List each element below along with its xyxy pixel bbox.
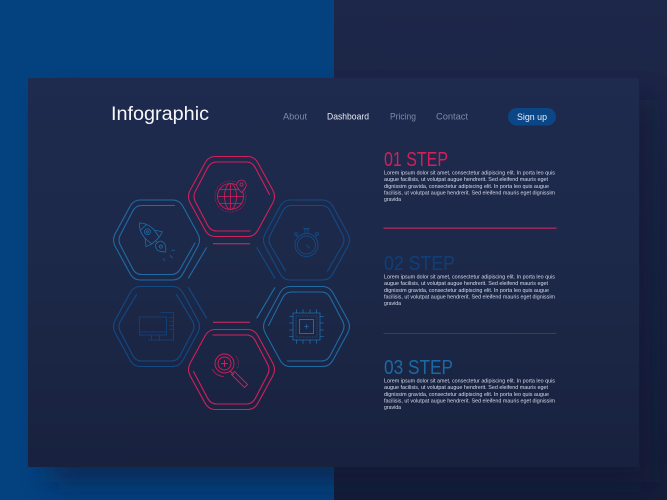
connector: blue diagonal lower right [257,287,275,318]
background: right dark block [334,0,667,500]
hexagon 1: globe (red, top) [188,156,274,236]
step 3 body: augue facilisis, ut volutpat augue hendrerit. Sed eleifend mauris eget [384,385,548,391]
step 2 body: Lorem ipsum dolor sit amet, consectetur adipiscing elit. In porta leo quis [384,275,555,281]
hexagon 5: chip (blue, lower right) [264,286,350,366]
hexagon 4: monitor (dim blue, lower left) [114,286,200,366]
step 2 body [384,275,555,307]
connector: blue diagonal [188,247,207,278]
connector: red line above bottom hexagon [213,321,250,323]
step 3 body: gravida [384,405,402,411]
title: Infographic [111,104,209,125]
step 3 body: facilisis, ut volutpat augue hendrerit. Sed eleifend mauris eget dignissim [384,398,555,404]
divider: red [384,228,556,229]
nav: Pricing: Pricing [390,112,416,122]
step 2 heading: 02 STEP [384,253,455,275]
connector: dim blue diagonal [257,247,275,278]
step 2 body: gravida [384,301,402,307]
hexagon 6: magnifier (red, bottom) [188,330,274,410]
connector: dim blue diagonal lower left [188,287,207,318]
sign up button: Sign up [517,112,547,123]
step 1 body: gravida [384,197,402,203]
step 1 [384,149,555,203]
step 1 body: facilisis, ut volutpat augue hendrerit. Sed eleifend mauris eget dignissim [384,190,555,196]
nav: Contact: Contact [436,112,468,122]
step 3 body: Lorem ipsum dolor sit amet, consectetur adipiscing elit. In porta leo quis [384,379,555,385]
hexagon 3: stopwatch (dim blue, right) [264,200,350,280]
icon: monitor and tower [140,312,174,341]
step 1 body: Lorem ipsum dolor sit amet, consectetur adipiscing elit. In porta leo quis [384,171,555,177]
main panel [28,78,639,467]
divider: blue [384,333,556,334]
nav: About: About [283,112,307,122]
step 2 [384,253,555,307]
step 2 body: augue facilisis, ut volutpat augue hendrerit. Sed eleifend mauris eget [384,281,548,287]
sign up button [508,108,556,126]
hexagon 2: rocket (blue, left) [114,200,200,280]
icon: globe with pin [215,180,246,212]
step 2 body: facilisis, ut volutpat augue hendrerit. Sed eleifend mauris eget dignissim [384,294,555,300]
step 1 body: augue facilisis, ut volutpat augue hendrerit. Sed eleifend mauris eget [384,177,548,183]
icon: magnifying glass [212,354,248,388]
navigation [283,112,468,122]
icon: microchip [290,310,324,344]
step 3 [384,357,555,411]
nav: Dashboard: Dashboard [327,112,369,122]
background: left blue block [0,0,334,500]
connector: red line below top hexagon [213,243,250,245]
step 1 body [384,171,555,203]
step 3 body [384,379,555,411]
step 3 body: dignissim gravida, consectetur adipiscing elit. In porta leo quis augue [384,392,549,398]
icon: rocket [131,215,180,266]
panel shadow [50,100,650,482]
step 1 body: dignissim gravida, consectetur adipiscing elit. In porta leo quis augue [384,184,549,190]
step 1 heading: 01 STEP [384,149,448,171]
step 3 heading: 03 STEP [384,357,453,379]
step 2 body: dignissim gravida, consectetur adipiscing elit. In porta leo quis augue [384,288,549,294]
icon: stopwatch [295,228,318,256]
